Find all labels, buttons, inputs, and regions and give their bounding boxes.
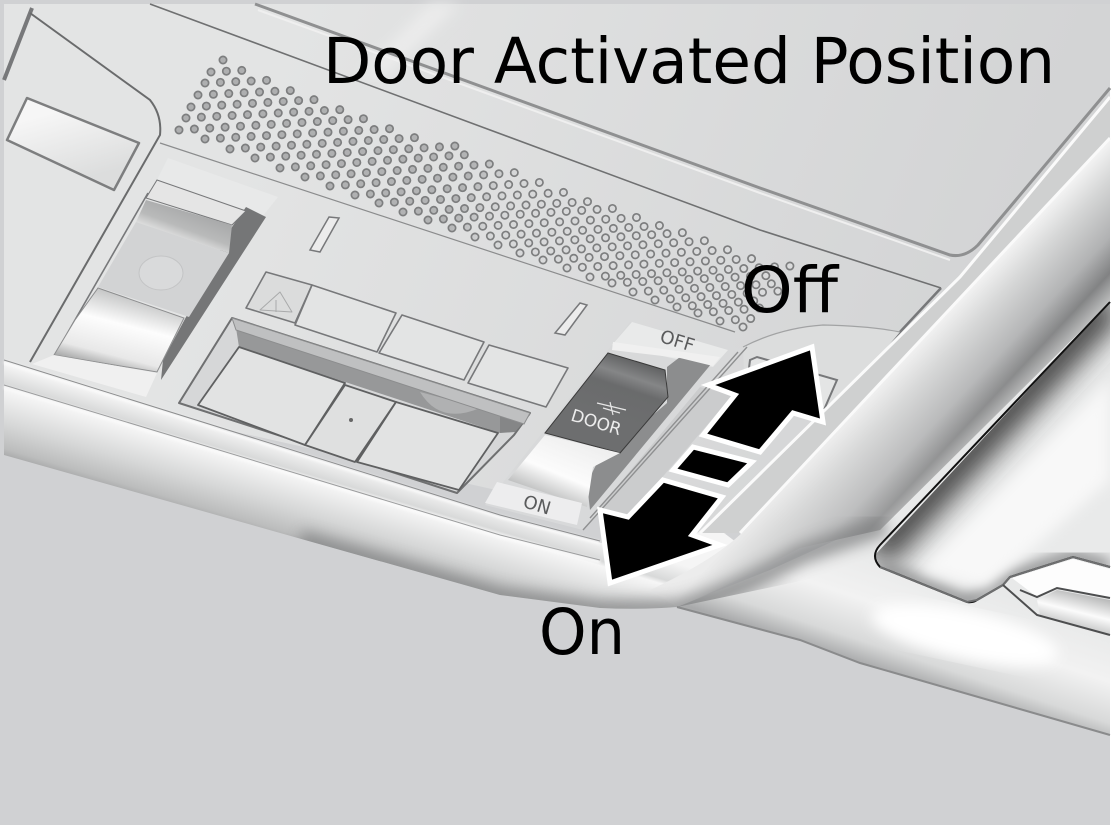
trim highlights (700, 97, 1110, 533)
console front lip (4, 360, 760, 609)
visor dome (420, 392, 480, 414)
door switch side (587, 357, 712, 510)
lower chrome surface (677, 290, 1110, 735)
visor cutout (875, 302, 1110, 635)
indicator slot 1 (310, 217, 339, 252)
lip highlights (4, 362, 600, 562)
arc panel (743, 325, 900, 415)
arrow: off (703, 347, 823, 452)
speaker grille (179, 60, 790, 327)
console panel line (160, 143, 735, 332)
label: On: On (539, 596, 625, 669)
DOOR label: DOOR (568, 406, 624, 440)
right trim band (650, 138, 1110, 607)
cutout sheen (920, 380, 1110, 590)
trim side lines (720, 288, 941, 525)
left slide switch (32, 158, 278, 397)
switch dark side (161, 207, 266, 380)
visor end shade (500, 412, 530, 433)
title: Door Activated Position (323, 25, 1055, 98)
arrow: centre segment (673, 447, 752, 485)
switch dimple (139, 256, 183, 290)
lower chrome edge (677, 607, 1110, 735)
cutout outline (875, 302, 1110, 602)
panel dot (349, 418, 353, 422)
switch upper part (136, 200, 232, 253)
small rear button (745, 357, 837, 412)
button 3 (468, 345, 568, 407)
button row (246, 272, 568, 407)
panel highlight streak (360, 4, 460, 75)
door switch top strip (612, 342, 720, 366)
trim strip between highlights (700, 97, 1110, 533)
map light assembly (179, 318, 530, 493)
door switch base (485, 322, 745, 530)
OFF label: OFF (657, 326, 697, 357)
home button (246, 272, 312, 323)
arrow backing strip (600, 387, 733, 517)
switch bottom pad (32, 355, 157, 397)
door switch (485, 322, 747, 530)
band fade overlay (650, 138, 1110, 607)
hinge lines (1003, 585, 1110, 635)
lip and band underside shadow (300, 525, 885, 610)
arc outline (743, 325, 900, 347)
arrow: on (600, 480, 722, 583)
door switch dark face (545, 353, 668, 453)
ON pad (485, 482, 582, 525)
visor shadow (236, 328, 500, 433)
switch lower roller (54, 288, 184, 372)
button 2 (379, 315, 484, 380)
light panel B (305, 385, 396, 462)
left curved panel (4, 8, 160, 362)
visor hinge white (1012, 559, 1110, 598)
trim line upper (255, 4, 1110, 256)
lamp cover (7, 98, 139, 190)
switch top strip (146, 180, 246, 225)
button 1 (295, 285, 396, 352)
chrome glow (867, 592, 1063, 678)
light panel A (198, 347, 345, 445)
light panel C (357, 402, 498, 490)
cutout lower shadow (880, 557, 1110, 602)
home icon (260, 292, 292, 312)
door switch lower roller (508, 435, 620, 507)
tray (179, 318, 530, 493)
indicator slot 2 (555, 303, 587, 335)
door icon (597, 402, 626, 415)
switch face (98, 222, 229, 317)
switch top pad (157, 158, 278, 217)
visor top bar (232, 318, 530, 424)
control direction arrows (600, 347, 823, 583)
label: Off: Off (741, 254, 840, 327)
visor hinge lower (1037, 590, 1110, 635)
ON label: ON (521, 491, 553, 520)
cutout inner shadow (875, 302, 1110, 555)
door switch top pad (612, 322, 728, 367)
trim line upper shadow (258, 10, 950, 260)
headliner upper panel (4, 4, 1110, 540)
